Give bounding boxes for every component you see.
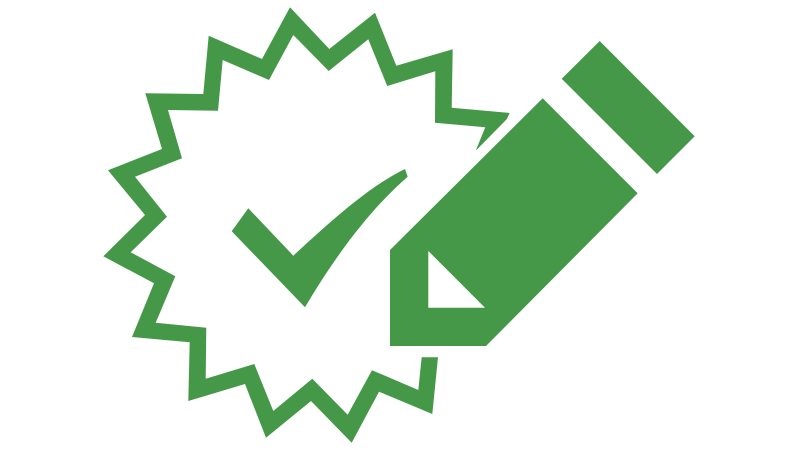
starburst badge outline [103, 7, 510, 443]
pencil eraser [562, 41, 695, 174]
pencil body [390, 98, 638, 346]
check mark [232, 169, 408, 307]
